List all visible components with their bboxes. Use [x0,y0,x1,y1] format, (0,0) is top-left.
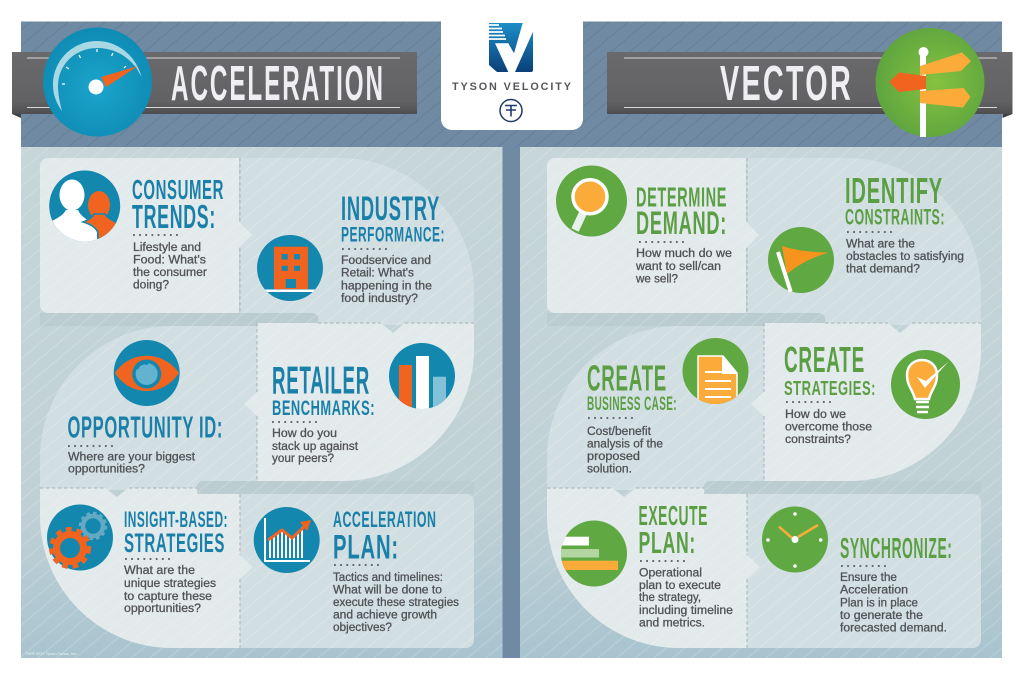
step: execute plan [560,500,733,630]
heading: STRATEGIES [124,528,225,558]
logo card [441,22,583,130]
description: objectives? [333,620,392,634]
step: consumer trends [45,170,224,292]
icon: signpost [876,28,984,137]
icon: velocity V mark [489,23,533,72]
description [639,566,733,630]
step: acceleration plan [254,507,459,634]
description: the strategy, [639,590,701,604]
description [635,246,732,286]
description: your peers? [272,451,334,465]
description: doing? [133,278,169,292]
panel: acceleration background [21,147,502,658]
icon: growth chart [254,507,320,573]
card: execute background [547,488,760,648]
heading: ACCELERATION [333,507,436,532]
description [133,240,207,292]
icon: Tyson T seal [500,100,522,122]
panel: vector background [520,147,1002,658]
heading: CREATE [784,339,865,380]
step: identify constraints [768,170,964,293]
description: solution. [587,462,632,476]
description: opportunities? [68,462,145,476]
description: Ensure the [840,570,897,584]
heading: CONSUMER [132,174,224,205]
description: food industry? [341,291,418,305]
description: we sell? [635,272,678,286]
description: What are the [124,563,195,577]
description: unique strategies [124,576,216,590]
description: opportunities? [124,601,201,615]
description [272,426,359,465]
description: Plan is in place [840,596,918,610]
icon: clock [762,506,828,572]
description: Retail: What's [341,266,414,280]
heading: PLAN: [333,528,399,566]
description [587,424,663,476]
card: opportunity background [40,326,257,490]
gutter between panels [502,147,520,658]
description: Where are your biggest [68,450,196,464]
acceleration banner: ACCELERATION [171,57,385,111]
divider pill: bottom [197,481,474,494]
header band [21,22,1002,148]
card: consumer background [40,158,252,313]
card: business case background [547,326,764,490]
description: obstacles to satisfying [846,249,964,263]
heading: CONSTRAINTS: [845,205,945,230]
heading: PERFORMANCE: [341,222,445,246]
description: How do we [785,407,846,421]
icon: flag [768,227,834,293]
heading: vector: VECTOR [720,57,853,111]
step: create strategies [784,339,960,446]
step: determine demand [556,166,732,286]
description: Acceleration [840,583,908,597]
heading: PLAN: [638,525,696,560]
description [68,450,196,476]
icon: magnifier [556,166,627,236]
description: Operational [639,566,702,580]
description: including timeline [639,603,733,617]
heading: STRATEGIES: [784,377,876,400]
brand name: TYSON VELOCITY [452,81,572,93]
heading: BUSINESS CASE: [587,394,677,415]
heading: CREATE [587,358,667,399]
panel: acceleration steps [21,147,502,658]
description: How do you [272,426,337,440]
step: opportunity id [68,340,223,476]
description: proposed [587,449,640,463]
icon: eye [114,340,180,406]
card: industry background [240,158,474,325]
description: overcome those [785,420,872,434]
icon: bar chart [389,343,455,411]
description: analysis of the [587,436,663,450]
description: the consumer [133,265,207,279]
heading: DETERMINE [636,182,727,213]
dashed seams [40,158,474,648]
description: and metrics. [639,616,705,630]
icon: document [682,338,748,405]
heading: BENCHMARKS: [272,397,375,420]
icon: speedometer [43,28,152,136]
step: retailer benchmarks: RETAILER [272,360,370,402]
icon: building [255,235,325,301]
description [785,407,872,446]
description: execute these strategies [333,595,459,609]
heading: EXECUTE [638,500,708,531]
description: What are the [846,237,915,251]
step: industry performance [255,190,445,305]
divider pill: bottom [704,481,981,494]
diagonal stripe texture [21,147,502,658]
description: constraints? [785,432,851,446]
icon: light bulb [891,350,960,419]
card: plan background [240,494,474,648]
copyright note: TM/® 2017 Tyson Foods, Inc. [25,651,77,656]
description: and achieve growth [333,608,437,622]
card: retailer background [244,323,474,481]
diagonal stripe texture [520,147,1002,658]
vector banner [607,28,1012,137]
icon: people [45,170,120,245]
description: want to sell/can [635,259,721,273]
acceleration banner [12,28,417,136]
heading: OPPORTUNITY ID: [68,410,223,444]
description: that demand? [846,262,920,276]
description: forecasted demand. [840,621,947,635]
card: insight background [40,488,253,648]
description [341,253,432,305]
description: Lifestyle and [133,240,201,254]
description: happening in the [341,278,432,292]
step: create business case [587,338,748,476]
icon: gears [47,504,113,570]
description: Food: What's [133,253,206,267]
description [840,570,947,635]
description: stack up against [272,439,359,453]
step: insight-based strategies [47,504,228,615]
description [124,563,216,615]
description: Cost/benefit [587,424,652,438]
description: What will be done to [333,583,442,597]
description: How much do we [636,246,732,260]
card: strategies background [751,323,981,481]
description: Tactics and timelines: [333,570,443,584]
step: synchronize [762,506,952,635]
description [846,237,964,276]
heading: IDENTIFY [845,170,943,211]
panel: vector steps [520,147,1002,658]
heading: INDUSTRY [341,190,440,228]
icon: gantt bars [560,520,627,586]
card: constraints background [747,158,981,325]
card: demand background [547,158,759,313]
description: to capture these [124,589,212,603]
divider pill: top [40,313,318,326]
description: plan to execute [639,578,721,592]
heading: INSIGHT-BASED: [124,507,228,532]
step: retailer benchmarks [272,343,455,465]
card: synchronize background [747,494,981,648]
heading: DEMAND: [636,205,727,241]
heading: TRENDS: [132,198,216,235]
dashed seams [547,158,981,648]
description [333,570,459,634]
description: Foodservice and [341,253,431,267]
description: to generate the [840,608,923,622]
divider pill: top [547,313,826,326]
